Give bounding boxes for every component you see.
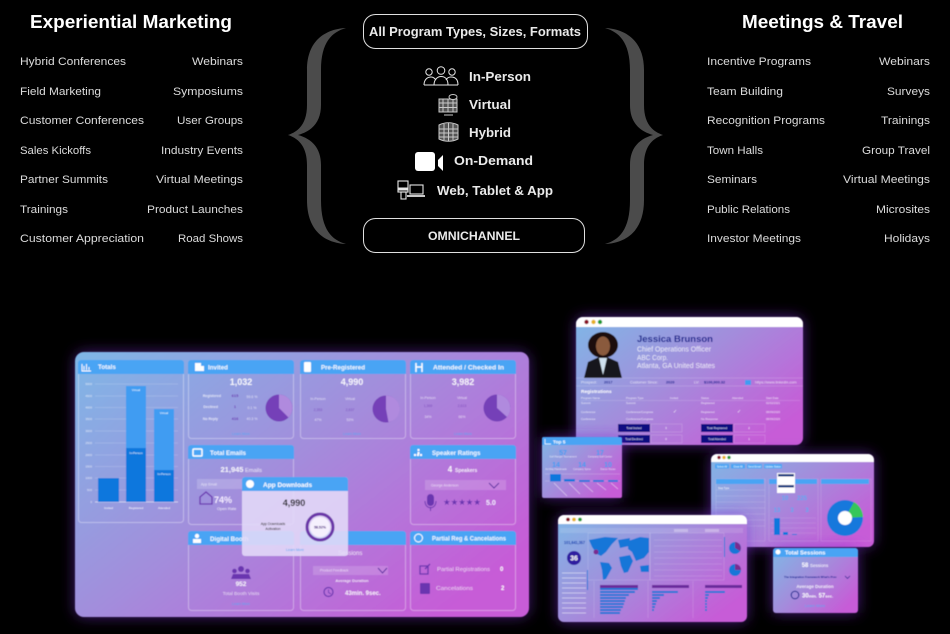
panel: total sessions: Total Sessions (785, 550, 825, 556)
panel: attended / checked in: 34% (424, 415, 432, 419)
window: list and donut dashboard: 10 (782, 496, 789, 502)
window: attendee profile: 2017 (604, 380, 612, 384)
panel: invited: 40.3 % (247, 417, 257, 421)
panel: total emails: Total Emails (210, 450, 247, 457)
panel: invited: Declined (203, 405, 218, 409)
window: attendee profile: Total Attended (708, 437, 726, 441)
callout: omnichannel: OMNICHANNEL (428, 229, 520, 243)
panel: total sessions: Average Duration (796, 584, 834, 589)
panel: totals bar chart: Attended (158, 506, 170, 510)
window: attendee profile: Chief Operations Officer (637, 346, 712, 354)
list: meetings and travel program types: Incentive Programs (707, 56, 812, 68)
window: top 5: 17 (596, 450, 604, 457)
panel: pre-registered: 2,637 (346, 408, 354, 412)
panel: speaker ratings (410, 445, 516, 524)
panel: total emails: App Email (201, 482, 217, 486)
panel: attended / checked in: Learn More (454, 432, 472, 436)
portrait (584, 332, 622, 378)
panel: totals bar chart: In-Person (157, 472, 171, 476)
panel: pre-registered: Pre-Registered (321, 364, 365, 372)
format: web, tablet and app (398, 181, 553, 199)
window: attendee profile: Conference (581, 417, 596, 421)
panel: attended / checked in: Virtual (457, 396, 467, 400)
panel: total sessions (773, 548, 858, 613)
window: attendee profile: 02/02/2021 (766, 401, 780, 405)
panel: totals bar chart: 1000 (85, 476, 92, 480)
window: attendee profile: 2 (748, 426, 750, 430)
window: list and donut dashboard: 3 (805, 508, 809, 514)
panel: pre-registered: Virtual (345, 397, 355, 401)
window: top 5: Dance House (600, 468, 616, 471)
window: list and donut dashboard: Update Status (765, 466, 782, 468)
list: experiential marketing program types: Sales Kickoffs (20, 145, 92, 157)
panel: totals bar chart: 3000 (85, 429, 92, 433)
list: meetings and travel program types: Seminars (707, 174, 758, 186)
panel: totals bar chart: Registered (129, 506, 144, 510)
right curly brace (605, 28, 663, 244)
panel: attended / checked in: In-Person (420, 396, 436, 400)
popup: app downloads (242, 477, 348, 556)
window: attendee profile: Summit (581, 401, 591, 405)
list: meetings and travel program types: Town Halls (707, 145, 764, 157)
window: attendee profile: Total Declined (625, 437, 643, 441)
panel: totals bar chart: Invited (104, 506, 113, 510)
list: experiential marketing program types: Webinars (192, 56, 244, 68)
format: in-person: In-Person (469, 70, 531, 84)
window: list and donut dashboard: 225 (797, 496, 808, 502)
callout: all program types: All Program Types, Sizes, Formats (369, 25, 581, 39)
list: meetings and travel program types: Webinars (879, 56, 931, 68)
panel: total emails (188, 445, 294, 524)
window: list and donut dashboard (711, 454, 874, 547)
panel: totals bar chart: 5000 (85, 382, 92, 386)
window: attendee profile: Start Date (766, 396, 779, 400)
panel: partial reg and cancellations: Cancelations (436, 586, 474, 592)
window: top 5: 14 (578, 462, 586, 469)
panel: partial reg and cancellations: Partial Registrations (437, 567, 491, 573)
list: experiential marketing program types: User Groups (177, 115, 244, 127)
panel: totals bar chart: 2000 (85, 453, 92, 457)
window: world map dashboard: 101,641,357 (564, 540, 585, 545)
window: attendee profile: 2020 (666, 380, 674, 384)
list: meetings and travel program types: Holidays (884, 233, 931, 245)
list: experiential marketing program types: Product Launches (147, 204, 244, 216)
panel: speaker ratings: ★★★★★ (443, 497, 481, 507)
window: top 5: 14 (552, 462, 560, 469)
list: experiential marketing program types: Virtual Meetings (156, 174, 244, 186)
window: attendee profile: ABC Corp. (637, 355, 668, 362)
popup: app downloads: 4,990 (283, 498, 305, 508)
list: experiential marketing program types (20, 56, 244, 245)
list: experiential marketing program types: Symposiums (173, 86, 244, 98)
list: meetings and travel program types: Investor Meetings (707, 233, 802, 245)
panel: speaker ratings: Speaker Ratings (432, 450, 481, 457)
panel: total sessions: The Integration Framework What's Prev (784, 575, 837, 579)
window: attendee profile: Conference/Congress (626, 410, 654, 414)
panel: pre-registered: 2,353 (314, 408, 322, 412)
panel: attended / checked in: Attended / Checked In (433, 364, 504, 372)
panel: total sessions: 30min. 57sec. (802, 594, 833, 600)
window: attendee profile: Conference/Congress (626, 417, 654, 421)
window: attendee profile: Customer Since: (630, 380, 658, 384)
window: top 5: Top 5 (553, 440, 566, 446)
window: attendee profile: Registered (701, 410, 715, 414)
list: experiential marketing program types: Hybrid Conferences (20, 56, 127, 68)
main dashboard (75, 352, 529, 617)
panel: total sessions: 58 Sessions (802, 563, 829, 569)
panel: invited: 416 (232, 416, 239, 421)
list: experiential marketing program types: Industry Events (161, 145, 244, 157)
popup: app downloads: 58.52% (314, 526, 327, 530)
panel: total emails: 74% (214, 495, 232, 505)
panel: totals bar chart: Totals (98, 364, 116, 371)
panel: totals bar chart: 3500 (85, 417, 92, 421)
format: hybrid (439, 123, 511, 141)
panel: partial reg and cancellations: 0 (500, 567, 504, 573)
window: attendee profile: Attended (732, 396, 744, 400)
window: attendee profile: Total Registered (707, 426, 728, 430)
panel: sessions: Average Duration (335, 578, 369, 583)
panel: totals bar chart: 4000 (85, 406, 92, 410)
popup: app downloads: App Downloads (263, 482, 312, 489)
window: attendee profile: Conference (581, 410, 596, 414)
window: attendee profile (576, 317, 803, 445)
window: top 5: 57 (559, 450, 567, 457)
window: attendee profile: $100,000.32 (704, 380, 725, 384)
panel: attended / checked in (410, 360, 516, 438)
window: attendee profile: Total Invited (627, 426, 642, 430)
list: meetings and travel program types: Team Building (707, 86, 783, 98)
panel: totals bar chart: 500 (87, 488, 92, 492)
callout: all program types (364, 14, 588, 48)
window: attendee profile: https://www.linkedin.com (755, 380, 797, 384)
window: attendee profile: No Response (701, 417, 718, 421)
window: attendee profile: 08/09/2020 (766, 417, 780, 421)
list: experiential marketing program types: Trainings (20, 204, 69, 216)
panel: invited: 0.1 % (248, 406, 256, 410)
window: top 5: Art May Handmade (545, 468, 567, 471)
left curly brace (288, 28, 346, 244)
window: attendee profile: Registered (701, 401, 715, 405)
world map (589, 537, 649, 580)
window: attendee profile: Status (701, 396, 710, 400)
list: experiential marketing program types: Road Shows (178, 233, 244, 245)
panel: pre-registered: In-Person (310, 397, 326, 401)
panel: totals bar chart (78, 360, 184, 522)
panel: digital booth (188, 531, 294, 610)
panel: sessions: Sessions (338, 551, 362, 557)
window: attendee profile: Registrations (581, 389, 612, 395)
list: experiential marketing program types: Customer Appreciation (20, 233, 144, 245)
window: list and donut dashboard: 3 (790, 508, 794, 514)
panel: attended / checked in: 66% (458, 415, 466, 419)
format: virtual (439, 94, 511, 115)
window: list and donut dashboard: 13 (774, 508, 781, 514)
list: experiential marketing program types: Field Marketing (20, 86, 101, 98)
window: attendee profile: Atlanta, GA United States (637, 363, 715, 370)
window: top 5: 10 (604, 462, 612, 469)
panel: attended / checked in: 1,369 (424, 404, 432, 408)
panel: totals bar chart: 0 (90, 500, 92, 504)
panel: pre-registered: 53% (346, 418, 354, 422)
panel: totals bar chart: 2500 (85, 441, 92, 445)
heading: Meetings & Travel: Meetings & Travel (742, 12, 903, 32)
format: virtual: Virtual (469, 98, 511, 112)
panel: invited: 59.6 % (247, 395, 257, 399)
panel: sessions (300, 531, 406, 610)
window: list and donut dashboard: Select All (717, 466, 728, 468)
panel: totals bar chart: Virtual (160, 411, 169, 415)
list: meetings and travel program types (707, 56, 931, 245)
list: meetings and travel program types: Microsites (876, 204, 931, 216)
panel: invited: 615 (232, 393, 239, 398)
window: attendee profile: Prospect: (581, 380, 597, 384)
panel: pre-registered: Learn More (343, 432, 361, 436)
popup: app downloads: App Downloads (261, 522, 286, 526)
list: experiential marketing program types: Customer Conferences (20, 115, 145, 127)
panel: total emails: Open Rate (217, 506, 237, 511)
list: meetings and travel program types: Surveys (887, 86, 931, 98)
panel: pre-registered: 47% (314, 418, 322, 422)
format: on-demand (415, 152, 533, 171)
window: world map dashboard: 36 (570, 556, 578, 562)
panel: invited: 1 (234, 404, 237, 409)
window: top 5 (542, 437, 622, 498)
panel: attended / checked in: 3,982 (452, 377, 474, 387)
window: attendee profile: LV: (694, 380, 699, 384)
panel: partial reg and cancellations: 2 (501, 586, 505, 592)
window: world map dashboard (558, 515, 747, 622)
panel: speaker ratings: 5.0 (486, 500, 496, 507)
window: top 5: Company Spine (573, 468, 591, 471)
window: attendee profile: 3 (665, 426, 667, 430)
panel: invited (188, 360, 294, 438)
window: attendee profile: 1 (748, 437, 750, 441)
window: list and donut dashboard: Clear All (733, 466, 743, 468)
panel: invited: Registered (203, 394, 221, 398)
panel: sessions: 43min. 9sec. (345, 591, 381, 597)
window: attendee profile: Program Type (626, 396, 644, 400)
panel: speaker ratings: Speakers (455, 468, 477, 474)
panel: totals bar chart: 1500 (85, 464, 92, 468)
panel: digital booth: Learn More (232, 602, 250, 606)
panel: speaker ratings: George Anderson (431, 484, 458, 488)
format: web, tablet and app: Web, Tablet & App (437, 184, 553, 198)
panel: digital booth: 952 (236, 581, 247, 588)
panel: totals bar chart: 4500 (85, 394, 92, 398)
panel: totals bar chart: In-Person (129, 451, 143, 455)
format: hybrid: Hybrid (469, 126, 511, 140)
callout: omnichannel (364, 218, 584, 252)
panel: pre-registered (300, 360, 406, 438)
panel: attended / checked in: 2,613 (458, 404, 466, 408)
panel: total sessions: Learn More (805, 603, 826, 608)
panel: invited: Invited (208, 364, 228, 372)
list: meetings and travel program types: Public Relations (707, 204, 791, 216)
panel: partial reg and cancellations: Partial Reg & Cancelations (432, 536, 507, 542)
list: meetings and travel program types: Group Travel (862, 145, 930, 157)
window: list and donut dashboard: Step Type (718, 487, 730, 490)
popup: app downloads: Learn More (286, 548, 304, 552)
format: in-person (424, 67, 531, 85)
list: meetings and travel program types: Recognition Programs (707, 115, 826, 127)
window: attendee profile: ✓ (673, 409, 677, 415)
list: meetings and travel program types: Virtual Meetings (843, 174, 931, 186)
window: attendee profile: ✓ (737, 409, 741, 415)
panel: digital booth: Total Booth Visits (223, 591, 260, 597)
panel: invited: Learn More (232, 432, 250, 436)
panel: totals bar chart: Virtual (132, 388, 141, 392)
heading: Experiential Marketing: Experiential Marketing (30, 12, 232, 32)
window: attendee profile: Invited (670, 396, 679, 400)
format: on-demand: On-Demand (454, 154, 533, 168)
panel: speaker ratings: 4 (448, 465, 453, 474)
window: attendee profile: 0 (665, 437, 667, 441)
panel: partial reg and cancellations (410, 531, 516, 610)
panel: sessions: Product Feedback (320, 568, 349, 572)
window: list and donut dashboard: Send Email (748, 466, 761, 468)
panel: pre-registered: 4,990 (341, 377, 363, 387)
panel: invited: 1,032 (230, 377, 252, 387)
window: attendee profile: Jessica Brunson (637, 334, 713, 345)
window: top 5: Company Golf Center (588, 456, 612, 458)
window: attendee profile: Summit (626, 401, 636, 405)
panel: total emails: 21,945 (221, 465, 243, 474)
panel: digital booth: Digital Booth (210, 536, 249, 543)
panel: invited: No Reply (203, 417, 218, 421)
list: experiential marketing program types: Partner Summits (20, 174, 109, 186)
popup: app downloads: Activation (265, 527, 281, 531)
window: attendee profile: 08/09/2020 (766, 410, 780, 414)
window: top 5: Golf Ranger Tournament (549, 456, 577, 458)
window: attendee profile: Program Name (581, 396, 600, 400)
list: meetings and travel program types: Trainings (881, 115, 931, 127)
panel: total emails: Emails (245, 468, 263, 474)
